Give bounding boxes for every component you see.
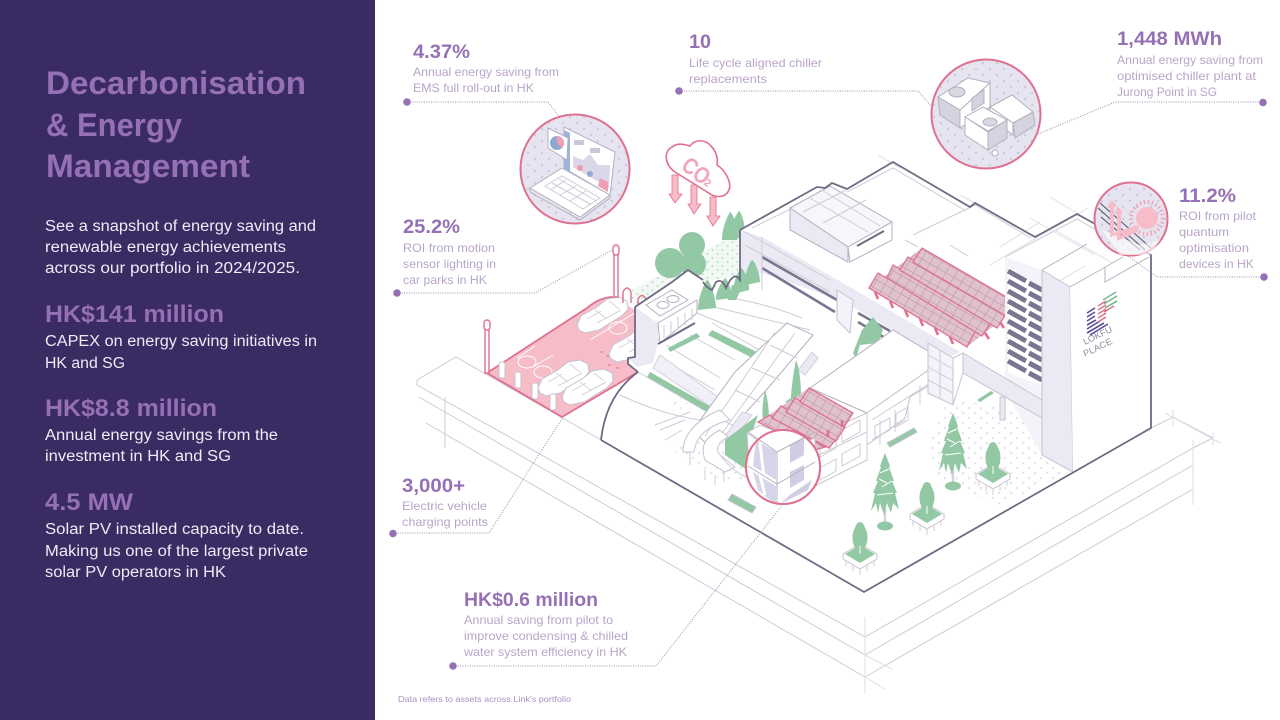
intro text: See a snapshot of energy saving and	[45, 218, 316, 235]
title: Management	[46, 148, 250, 184]
stat: HK$8.8 million	[45, 395, 278, 465]
stat: HK$141 million	[45, 301, 317, 372]
green planting strip	[632, 233, 738, 310]
callout: 25.2%: sensor lighting in	[403, 257, 496, 271]
callout: 10: 10	[689, 32, 711, 53]
callout: 11.2%: optimisation	[1179, 241, 1249, 255]
title: Decarbonisation	[46, 65, 306, 101]
leader lines	[393, 91, 1264, 666]
tower	[1005, 240, 1151, 472]
callout: HK$0.6 million: improve condensing & chilled	[464, 629, 628, 643]
charging posts	[499, 362, 556, 410]
tree row	[698, 260, 760, 310]
callout: 1,448 MWh: Annual energy saving from	[1117, 53, 1263, 67]
small cypress trees	[725, 317, 883, 470]
callout: 10: Life cycle aligned chiller	[689, 56, 822, 70]
callout: 25.2%	[393, 217, 496, 297]
stat: 4.5 MW: Making us one of the largest private	[45, 543, 308, 560]
callout: 4.37%: EMS full roll-out in HK	[413, 81, 534, 95]
callout: HK$0.6 million: Annual saving from pilot to	[464, 613, 613, 627]
link bridge	[963, 353, 1042, 420]
callout: 1,448 MWh: Jurong Point in SG	[1117, 85, 1217, 99]
callout: 11.2%: ROI from pilot	[1179, 209, 1257, 223]
callout: 11.2%	[1179, 186, 1268, 281]
callout: 1,448 MWh: 1,448 MWh	[1117, 29, 1222, 50]
callout: 25.2%: ROI from motion	[403, 241, 495, 255]
mid-level terraces	[605, 296, 810, 443]
callout: HK$0.6 million: HK$0.6 million	[464, 590, 598, 611]
callout: 25.2%: 25.2%	[403, 217, 460, 238]
callout: 3,000+	[389, 476, 488, 537]
site floor	[601, 162, 1151, 592]
intro text	[45, 218, 316, 277]
solar panels: main roof	[869, 248, 1020, 347]
tower logo	[1081, 292, 1117, 359]
icon: CO2 cloud: 2	[701, 177, 713, 190]
title: & Energy	[46, 107, 182, 143]
building outline	[601, 162, 1151, 592]
stat: 4.5 MW	[45, 489, 308, 581]
icon: sun	[1131, 202, 1163, 234]
stat: HK$8.8 million: investment in HK and SG	[45, 448, 231, 465]
callout: 3,000+: Electric vehicle	[402, 499, 487, 513]
stat: HK$8.8 million: Annual energy savings from the	[45, 427, 278, 444]
striped wall band	[740, 230, 960, 360]
laptop	[530, 127, 615, 220]
footnote: Data refers to assets across Link's portfolio	[398, 694, 571, 704]
callout: 11.2%: devices in HK	[1179, 257, 1254, 271]
callout: 25.2%: car parks in HK	[403, 273, 487, 287]
left service block	[628, 230, 760, 372]
intro text: across our portfolio in 2024/2025.	[45, 260, 300, 277]
ground guide lines	[417, 357, 1220, 693]
intro text: renewable energy achievements	[45, 239, 286, 256]
stat: HK$141 million: CAPEX on energy saving initiatives in	[45, 333, 317, 350]
title	[46, 65, 306, 184]
cars	[538, 297, 660, 405]
tower windows	[1008, 267, 1042, 385]
arrows: carbon reduction	[669, 175, 720, 226]
circle: solar quantum device	[1094, 182, 1168, 256]
corner block	[747, 425, 815, 503]
callout: 1,448 MWh: optimised chiller plant at	[1117, 69, 1257, 83]
panel: left sidebar	[0, 0, 375, 720]
icon: CO2 cloud	[666, 141, 730, 226]
callout: 10	[675, 32, 822, 95]
stat: 4.5 MW: 4.5 MW	[45, 489, 133, 516]
pier	[928, 343, 963, 405]
tower logo: PLACE	[1081, 336, 1114, 359]
tower logo: LOKFU	[1081, 324, 1114, 347]
car park	[484, 245, 660, 417]
callout: 3,000+: charging points	[402, 515, 488, 529]
stat: 4.5 MW: Solar PV installed capacity to date.	[45, 521, 304, 538]
pier	[837, 290, 853, 333]
circle: chillers	[932, 60, 1040, 168]
illustration: isometric building	[484, 155, 1151, 592]
callout: 4.37%: Annual energy saving from	[413, 65, 559, 79]
stat: 4.5 MW: solar PV operators in HK	[45, 564, 227, 581]
skylight block	[790, 186, 892, 262]
trees and planters	[843, 413, 1010, 575]
circle: EMS laptop	[520, 114, 630, 224]
curved ramp	[601, 372, 760, 485]
chiller units	[938, 78, 1035, 156]
solar panels: corner block	[758, 388, 853, 450]
callout: HK$0.6 million	[449, 590, 628, 670]
callout: 11.2%: quantum	[1179, 225, 1229, 239]
callout: 3,000+: 3,000+	[402, 476, 465, 497]
lower building	[777, 330, 963, 505]
callout: 4.37%: 4.37%	[413, 42, 470, 63]
bench	[728, 494, 756, 513]
upper roof deck	[740, 155, 1145, 390]
courtyard dots	[930, 400, 1068, 505]
callout: 10: replacements	[689, 72, 767, 86]
callout: 4.37%	[403, 42, 559, 106]
stat: HK$8.8 million: HK$8.8 million	[45, 395, 217, 422]
icon: up arrows	[1107, 200, 1139, 241]
lamp posts	[484, 245, 646, 373]
callout: HK$0.6 million: water system efficiency in HK	[463, 645, 627, 659]
stat: HK$141 million: HK$141 million	[45, 301, 224, 328]
trees behind	[655, 211, 745, 278]
lower building facade	[777, 360, 943, 505]
stat: HK$141 million: HK and SG	[45, 355, 125, 372]
escalator	[693, 323, 818, 450]
callout: 11.2%: 11.2%	[1179, 186, 1236, 207]
callout: 1,448 MWh	[1117, 29, 1267, 106]
icon: CO2 cloud: CO	[677, 151, 716, 190]
EV parking bays	[517, 312, 636, 378]
circle: condensing water window	[746, 430, 820, 504]
